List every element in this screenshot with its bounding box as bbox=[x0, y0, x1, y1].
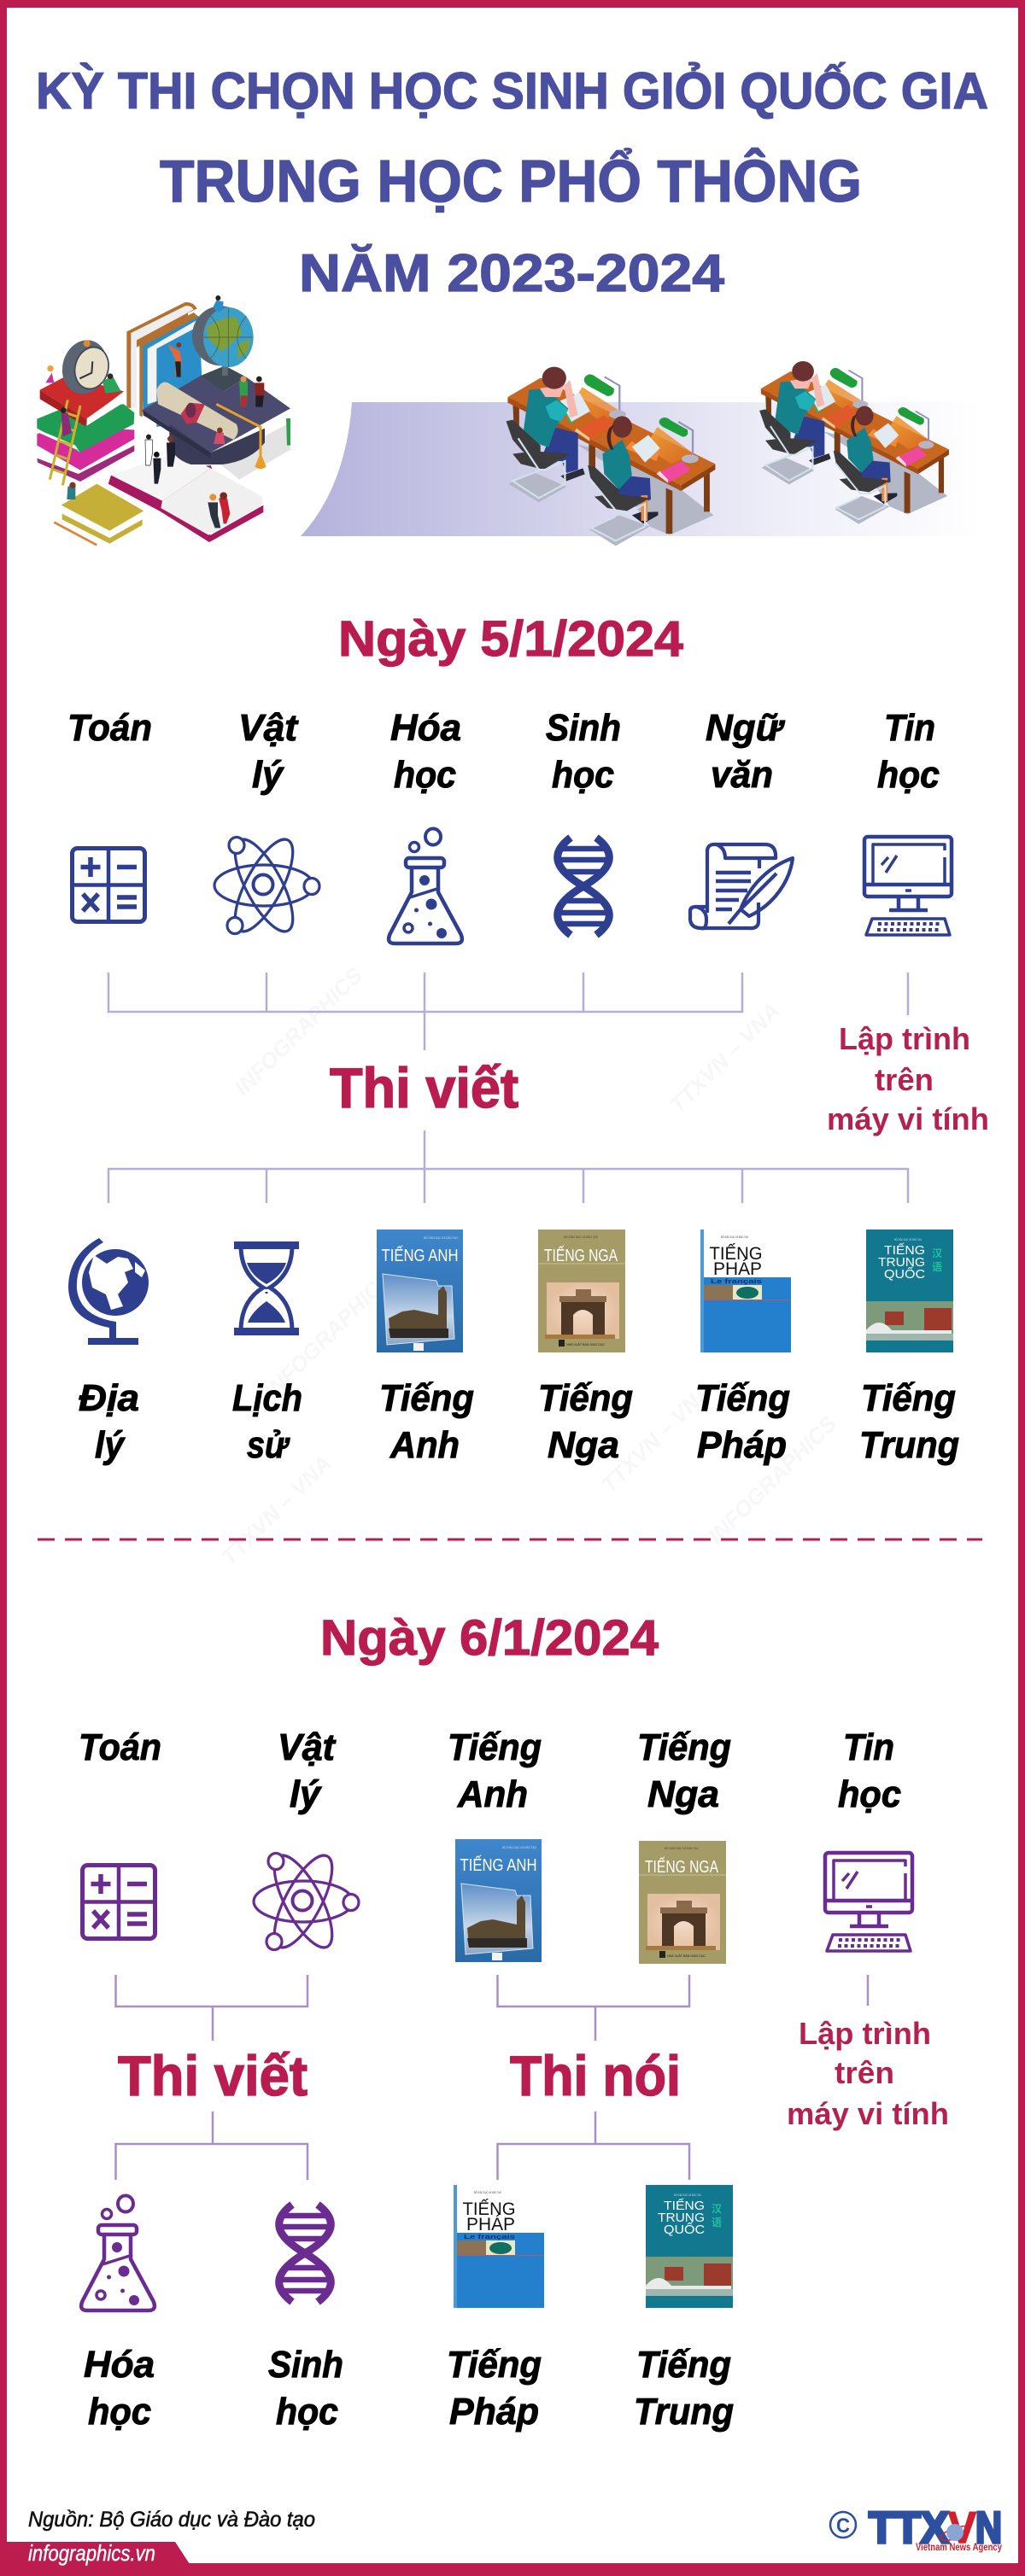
labels row 4 bbox=[84, 2344, 734, 2433]
subject labels row 3 bbox=[79, 1726, 901, 1815]
book cover: Tiếng Pháp: TIẾNG bbox=[463, 2199, 516, 2219]
book cover: Tiếng Trung: BỘ GIÁO DỤC VÀ ĐÀO TẠO bbox=[674, 2193, 701, 2197]
icon: flask bbox=[389, 828, 462, 943]
icon: calculator bbox=[82, 1865, 155, 1938]
label: Lập trình trên máy vi tính: Lập trình bbox=[839, 1021, 970, 1056]
subject labels row 1: lý bbox=[252, 754, 284, 796]
logo: TTXVN: Vietnam News Agency bbox=[916, 2543, 1002, 2553]
label: Thi viết: Thi viết bbox=[118, 2044, 308, 2107]
watermarks: INFOGRAPHICS bbox=[259, 1265, 398, 1404]
book cover: Tiếng Nga bbox=[639, 1841, 726, 1964]
icon: hourglass bbox=[234, 1241, 299, 1335]
subject labels row 1: học bbox=[394, 754, 456, 796]
label: Lập trình trên máy vi tính: máy vi tính bbox=[787, 2096, 949, 2131]
icon: computer bbox=[825, 1853, 912, 1951]
label: Lập trình trên máy vi tính bbox=[827, 1021, 989, 1136]
labels row 2: Tiếng bbox=[538, 1377, 633, 1419]
book cover: Tiếng Anh bbox=[455, 1839, 542, 1962]
logo: TTXVN: V bbox=[948, 2503, 976, 2553]
labels row 4: Pháp bbox=[449, 2391, 539, 2433]
watermarks: TTXVN – VNA bbox=[665, 998, 785, 1118]
book cover: Tiếng Anh: TIẾNG ANH bbox=[381, 1246, 458, 1265]
icon: calculator bbox=[72, 849, 145, 922]
labels row 2 bbox=[79, 1377, 959, 1466]
subject labels row 1: Hóa bbox=[390, 707, 461, 749]
subject labels row 3: Tiếng bbox=[637, 1726, 731, 1768]
watermarks: INFOGRAPHICS bbox=[229, 962, 368, 1101]
subject labels row 3: Toán bbox=[79, 1726, 161, 1768]
label: Lập trình trên máy vi tính bbox=[787, 2016, 949, 2131]
book cover: Tiếng Nga: NHÀ XUẤT BẢN GIÁO DỤC bbox=[667, 1954, 706, 1958]
label: Lập trình trên máy vi tính: trên bbox=[835, 2055, 894, 2090]
logo: TTXVN: TTX bbox=[869, 2503, 949, 2553]
watermarks bbox=[216, 962, 842, 1570]
connector to Thi viết bbox=[108, 973, 908, 1050]
subject labels row 3: học bbox=[838, 1773, 901, 1815]
title bbox=[36, 62, 988, 303]
book cover: Tiếng Trung: 汉 bbox=[932, 1247, 942, 1259]
labels row 2: Pháp bbox=[697, 1424, 787, 1466]
book cover: Tiếng Pháp: PHÁP bbox=[466, 2215, 515, 2234]
label: Lập trình trên máy vi tính: Lập trình bbox=[799, 2016, 931, 2051]
labels row 2: Lịch bbox=[232, 1377, 302, 1419]
book cover: Tiếng Anh: TIẾNG ANH bbox=[460, 1855, 536, 1875]
book cover: Tiếng Trung bbox=[866, 1230, 953, 1352]
dashed divider bbox=[38, 1539, 982, 1540]
connectors below Thi viết and Thi nói bbox=[116, 2112, 689, 2180]
book cover: Tiếng Trung bbox=[646, 2185, 733, 2308]
watermarks: INFOGRAPHICS bbox=[703, 1411, 842, 1549]
connector from Thi viết bbox=[108, 1130, 908, 1203]
book cover: Tiếng Anh bbox=[377, 1230, 463, 1352]
labels row 2: Tiếng bbox=[379, 1377, 474, 1419]
source line: Nguồn: Bộ Giáo dục và Đào tạo bbox=[28, 2508, 315, 2532]
labels row 2: Trung bbox=[859, 1424, 959, 1466]
labels row 2: sử bbox=[247, 1424, 290, 1466]
book cover: Tiếng Trung: BỘ GIÁO DỤC VÀ ĐÀO TẠO bbox=[894, 1237, 922, 1241]
labels row 4: học bbox=[88, 2391, 151, 2433]
title: TRUNG HỌC PHỔ THÔNG bbox=[160, 147, 862, 214]
subject labels row 1: học bbox=[552, 754, 614, 796]
book cover: Tiếng Pháp: Le français bbox=[711, 1277, 762, 1285]
logo: TTXVN bbox=[830, 2503, 1002, 2553]
tab: infographics.vn: infographics.vn bbox=[28, 2540, 155, 2566]
subject labels row 1 bbox=[67, 707, 940, 796]
labels row 2: Nga bbox=[548, 1424, 619, 1466]
label: Lập trình trên máy vi tính: máy vi tính bbox=[827, 1101, 989, 1136]
labels row 2: Anh bbox=[390, 1424, 460, 1466]
book cover: Tiếng Trung: TRUNG bbox=[878, 1255, 925, 1270]
book cover: Tiếng Nga: TIẾNG NGA bbox=[544, 1246, 618, 1265]
subject labels row 1: Vật bbox=[238, 707, 299, 749]
watermarks: TTXVN – VNA bbox=[216, 1451, 337, 1570]
subject labels row 3: Tiếng bbox=[448, 1726, 542, 1768]
label: Lập trình trên máy vi tính: trên bbox=[875, 1062, 934, 1097]
book cover: Tiếng Trung: 语 bbox=[712, 2216, 722, 2228]
subject labels row 3: Nga bbox=[647, 1773, 719, 1815]
subject labels row 1: Tin bbox=[884, 707, 935, 749]
connectors above Thi viết and Thi nói bbox=[116, 1975, 868, 2041]
icon: atom bbox=[214, 832, 319, 939]
title: NĂM 2023-2024 bbox=[299, 244, 725, 303]
labels row 2: lý bbox=[95, 1424, 126, 1466]
icon: DNA bbox=[558, 838, 609, 935]
label: Thi nói: Thi nói bbox=[510, 2044, 681, 2107]
icon: atom bbox=[254, 1848, 359, 1955]
icon: globe bbox=[68, 1238, 149, 1345]
watermarks: TTXVN – VNA bbox=[596, 1378, 717, 1498]
book cover: Tiếng Anh: BỘ GIÁO DỤC VÀ ĐÀO TẠO bbox=[502, 1845, 536, 1849]
labels row 2: Tiếng bbox=[695, 1377, 790, 1419]
book cover: Tiếng Trung: TRUNG bbox=[658, 2211, 705, 2225]
labels row 4: Trung bbox=[634, 2391, 734, 2433]
book cover: Tiếng Trung: QUỐC bbox=[664, 2222, 705, 2237]
icon: DNA bbox=[279, 2205, 331, 2302]
book cover: Tiếng Nga bbox=[538, 1230, 625, 1352]
book cover: Tiếng Nga: NHÀ XUẤT BẢN GIÁO DỤC bbox=[566, 1342, 605, 1346]
subject labels row 1: học bbox=[877, 754, 940, 796]
subject labels row 3: Tin bbox=[843, 1726, 894, 1768]
book cover: Tiếng Trung: TIẾNG bbox=[884, 1243, 925, 1258]
section heading: Ngày 6/1/2024: Ngày 6/1/2024 bbox=[320, 1610, 659, 1666]
icon: computer bbox=[864, 837, 952, 935]
labels row 2: Tiếng bbox=[861, 1377, 956, 1419]
subject labels row 1: Sinh bbox=[546, 707, 621, 749]
logo: TTXVN: N bbox=[975, 2503, 1002, 2553]
book cover: Tiếng Nga: BỘ GIÁO DỤC VÀ ĐÀO TẠO bbox=[665, 1846, 699, 1850]
labels row 4: Tiếng bbox=[636, 2344, 731, 2386]
labels row 2: Địa bbox=[79, 1377, 139, 1419]
subject labels row 1: Toán bbox=[67, 707, 152, 749]
book cover: Tiếng Pháp: PHÁP bbox=[713, 1259, 762, 1279]
labels row 4: học bbox=[276, 2391, 338, 2433]
book cover: Tiếng Anh: BỘ GIÁO DỤC VÀ ĐÀO TẠO bbox=[424, 1235, 458, 1240]
subject labels row 3: Vật bbox=[278, 1726, 337, 1768]
book cover: Tiếng Nga: BỘ GIÁO DỤC VÀ ĐÀO TẠO bbox=[564, 1235, 598, 1239]
book cover: Tiếng Trung: TIẾNG bbox=[664, 2199, 705, 2213]
book cover: Tiếng Pháp: BỘ GIÁO DỤC VÀ ĐÀO TẠO bbox=[474, 2190, 501, 2194]
book cover: Tiếng Pháp bbox=[454, 2185, 544, 2308]
illustration: students at desks bbox=[507, 361, 949, 546]
labels row 4: Tiếng bbox=[447, 2344, 542, 2386]
subject labels row 3: Anh bbox=[457, 1773, 528, 1815]
subject labels row 1: văn bbox=[711, 754, 773, 796]
subject labels row 1: Ngữ bbox=[706, 707, 786, 749]
title: KỲ THI CHỌN HỌC SINH GIỎI QUỐC GIA bbox=[36, 62, 988, 120]
book cover: Tiếng Pháp: TIẾNG bbox=[709, 1244, 762, 1264]
icon: scroll and quill bbox=[690, 844, 793, 928]
book cover: Tiếng Pháp: Le français bbox=[464, 2233, 515, 2240]
book cover: Tiếng Trung: 语 bbox=[932, 1260, 942, 1273]
labels row 4: Hóa bbox=[84, 2344, 155, 2386]
label: Thi viết: Thi viết bbox=[330, 1056, 518, 1119]
icon: flask bbox=[81, 2196, 155, 2310]
book cover: Tiếng Pháp: BỘ GIÁO DỤC VÀ ĐÀO TẠO bbox=[721, 1235, 748, 1239]
section heading: Ngày 5/1/2024: Ngày 5/1/2024 bbox=[338, 611, 683, 667]
illustration: books, globe and graduation cap bbox=[37, 295, 290, 545]
book cover: Tiếng Trung: QUỐC bbox=[884, 1266, 925, 1282]
logo: TTXVN: C bbox=[836, 2515, 850, 2538]
purple gradient band bbox=[301, 402, 982, 536]
labels row 4: Sinh bbox=[268, 2344, 343, 2386]
book cover: Tiếng Pháp bbox=[700, 1230, 791, 1352]
book cover: Tiếng Trung: 汉 bbox=[712, 2203, 722, 2215]
book cover: Tiếng Nga: TIẾNG NGA bbox=[645, 1857, 719, 1877]
subject labels row 3: lý bbox=[290, 1773, 322, 1815]
